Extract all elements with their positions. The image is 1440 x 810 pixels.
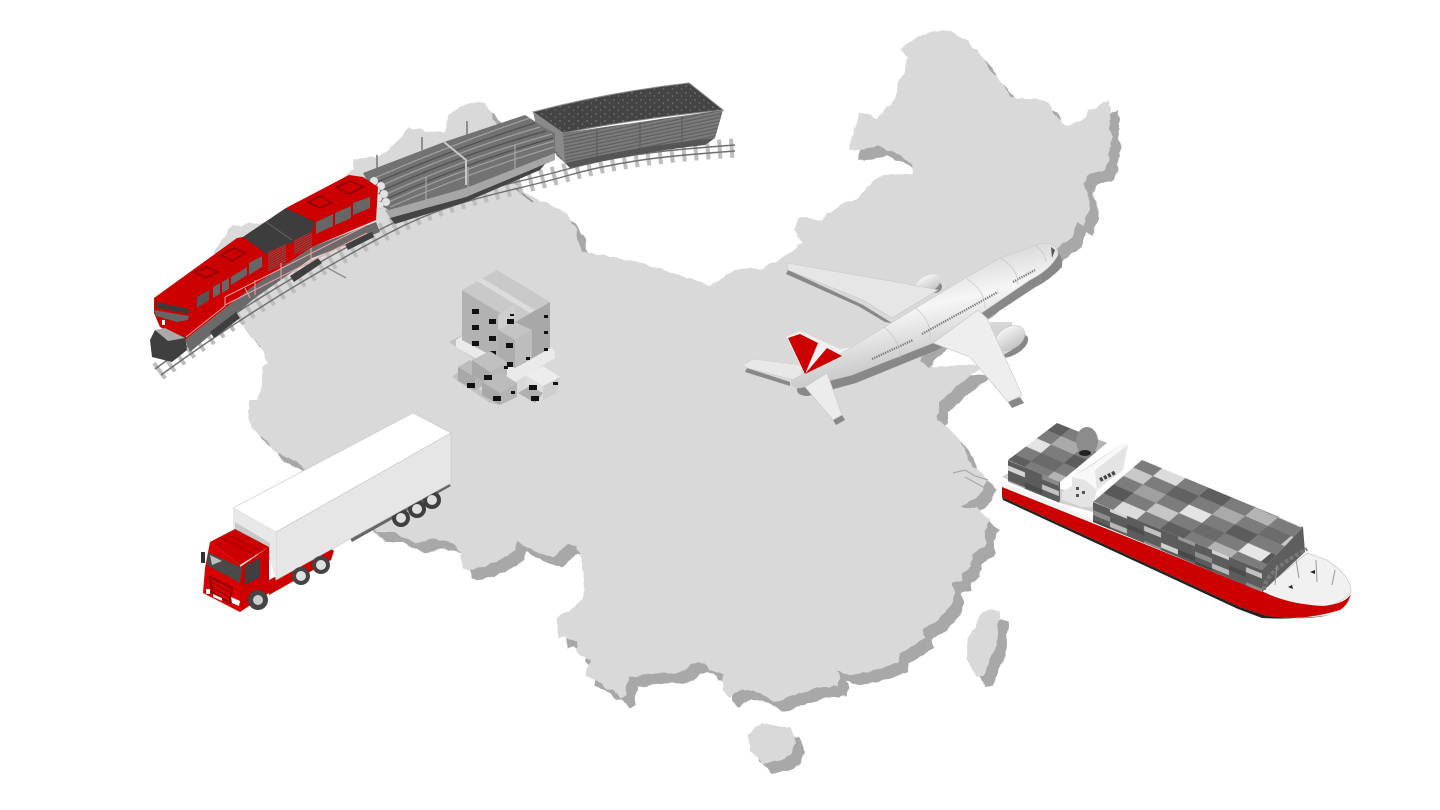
sleepers <box>158 148 735 372</box>
cab side <box>240 547 269 612</box>
panel lines <box>884 245 1046 358</box>
grille <box>210 577 232 603</box>
pallet <box>456 336 555 382</box>
stack top <box>462 270 550 322</box>
map of China <box>215 30 1122 773</box>
cab roof <box>210 529 269 565</box>
airplane <box>743 243 1062 425</box>
windshield <box>207 552 242 583</box>
map land <box>215 30 1113 763</box>
trailer top <box>233 413 451 532</box>
carton C <box>482 372 517 393</box>
right face of stack <box>515 302 550 368</box>
carton B <box>472 351 507 372</box>
coal load <box>533 83 723 133</box>
trailer end <box>233 508 276 580</box>
front window band <box>156 302 189 314</box>
far engine <box>912 270 944 298</box>
log ends <box>370 177 390 208</box>
rear wheels <box>392 491 441 527</box>
main stack bow end <box>1262 527 1305 592</box>
border shadow strokes <box>326 188 533 278</box>
hull waterline <box>1002 497 1330 619</box>
near wing <box>933 310 1022 402</box>
near engine <box>990 320 1029 358</box>
nose <box>150 330 187 362</box>
wagon underframe <box>565 138 715 168</box>
log wagon <box>363 115 555 224</box>
plane shadows <box>745 250 1062 425</box>
aft deck <box>1002 472 1110 514</box>
far stabilizer <box>743 359 802 382</box>
log grooves <box>370 118 554 207</box>
headlights <box>231 597 240 606</box>
breakwater <box>1264 549 1307 590</box>
rails <box>155 145 735 369</box>
lower carton labels <box>467 366 515 401</box>
lower left cartons shadow <box>452 372 500 405</box>
wagon end <box>533 112 565 163</box>
front stripe <box>154 310 189 322</box>
locomotive <box>150 175 380 362</box>
front box <box>498 322 532 340</box>
roof hatches <box>195 181 363 278</box>
aft container top <box>1008 423 1107 482</box>
container ship <box>1002 423 1351 619</box>
left face of stack <box>462 290 515 368</box>
aft container side <box>1008 460 1060 503</box>
superstructure <box>1062 443 1128 507</box>
carton A <box>458 360 487 377</box>
grilles <box>268 244 286 272</box>
bow deck <box>1260 553 1351 607</box>
side window <box>245 558 260 585</box>
upper carton labels <box>472 309 548 367</box>
far wing <box>787 263 938 318</box>
pallet shadow <box>449 335 520 380</box>
underframe <box>390 164 545 224</box>
Hainan <box>747 722 797 763</box>
deck <box>385 150 555 218</box>
deck fittings <box>1275 560 1335 585</box>
near stabilizer <box>805 373 842 420</box>
red body <box>154 175 378 340</box>
notch shading <box>498 304 515 330</box>
pile divide <box>444 142 466 185</box>
handrails <box>186 225 367 337</box>
tail fin outline <box>786 331 855 376</box>
front stanchions <box>426 145 515 203</box>
coal wagon <box>533 83 723 168</box>
truck <box>201 413 451 612</box>
main stack side <box>1093 502 1262 592</box>
trailer side skirt <box>350 483 451 542</box>
wagon side <box>533 110 723 163</box>
side windows <box>213 197 370 298</box>
lamps <box>162 320 165 325</box>
undercarriage <box>185 222 380 352</box>
funnel <box>1076 427 1098 455</box>
main stack top <box>1093 460 1303 570</box>
log pile <box>363 115 555 210</box>
cab window <box>197 290 209 308</box>
white deck stripe <box>1002 482 1260 591</box>
tail livery <box>788 334 842 374</box>
Taiwan <box>967 608 1000 677</box>
cockpit <box>1051 247 1055 258</box>
stacked boxes <box>449 270 560 405</box>
chassis <box>269 548 334 595</box>
dark engine hood <box>243 208 315 255</box>
cabin windows <box>872 270 1035 359</box>
cab and tractor wheels <box>248 556 330 610</box>
trailer side <box>276 433 451 580</box>
cab front <box>203 542 240 612</box>
wagon ribs <box>597 116 682 157</box>
bogies <box>210 232 374 338</box>
railway track <box>155 145 735 375</box>
mirror <box>201 552 205 563</box>
Yangtze estuary detail <box>953 470 988 488</box>
fuselage <box>792 243 1058 388</box>
lower right cartons <box>525 366 560 386</box>
hull <box>1002 487 1351 618</box>
rear stanchions <box>377 121 467 173</box>
map shadow <box>224 40 1122 773</box>
